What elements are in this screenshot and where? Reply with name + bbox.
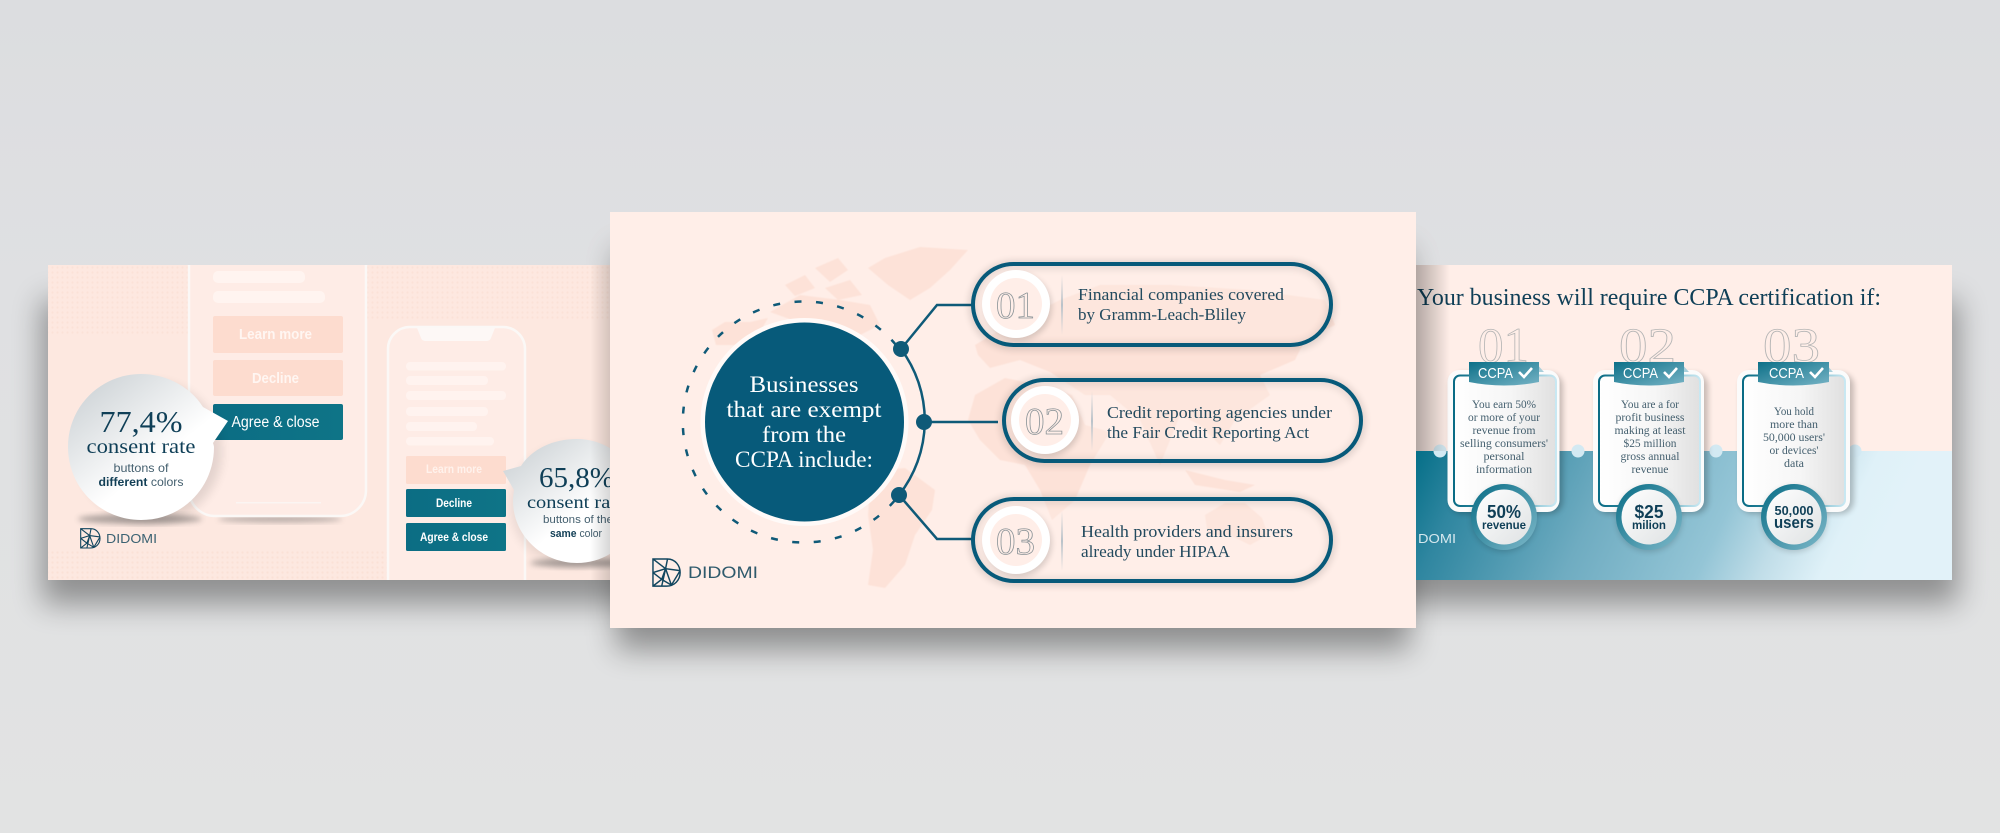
panel shadows	[42, 250, 1958, 650]
button: agree and close: Agree & close	[232, 414, 320, 431]
floor shadow: large phone	[218, 516, 342, 522]
item 3	[973, 499, 1331, 582]
large phone	[189, 240, 366, 516]
button: decline small: Decline	[436, 498, 472, 510]
card text: selling consumers'	[1460, 438, 1548, 450]
card 3	[1737, 317, 1854, 552]
card text: profit business	[1616, 412, 1685, 424]
ribbon: CCPA	[1769, 365, 1804, 382]
button: learn more	[213, 316, 343, 353]
title circle	[700, 318, 908, 526]
stat: $25 million	[1616, 484, 1682, 552]
card text: or more of your	[1468, 412, 1540, 424]
card text	[1763, 406, 1825, 470]
item 1	[973, 264, 1331, 346]
stat: 50% revenue: 50%	[1487, 502, 1521, 522]
callout: 65,8% consent rate	[503, 439, 610, 566]
panel: CCPA exemptions slide	[610, 212, 1416, 628]
card text: information	[1476, 464, 1532, 476]
card text: or devices'	[1770, 445, 1818, 457]
callout: 77,4% consent rate: different colors	[98, 475, 184, 489]
stat: $25 million: milion	[1632, 518, 1666, 532]
button: agree and close small: Agree & close	[420, 532, 488, 544]
button: decline	[213, 360, 343, 396]
callout: 77,4% consent rate	[68, 374, 228, 523]
floor shadow: bubble 77,4%	[78, 514, 202, 524]
callout: 77,4% consent rate: buttons of	[114, 461, 169, 475]
callout: 65,8% consent rate: same color	[550, 528, 602, 540]
title circle: CCPA include:	[735, 447, 873, 472]
item 1: by Gramm-Leach-Bliley	[1078, 305, 1247, 324]
card text: data	[1784, 458, 1804, 470]
floor shadow: bubble 65,8%	[530, 558, 630, 568]
stat: 50,000 users: users	[1774, 513, 1814, 532]
card text: You earn 50%	[1472, 399, 1536, 411]
card text: revenue	[1632, 464, 1668, 476]
ribbon: CCPA	[1478, 365, 1513, 382]
item 1: Financial companies covered	[1078, 285, 1285, 304]
panel: consent rate slide	[48, 265, 610, 580]
world map	[712, 247, 1335, 588]
item 1: 01	[996, 285, 1035, 327]
item 3: already under HIPAA	[1081, 542, 1230, 561]
card 2	[1593, 317, 1708, 552]
heading: Your business will require CCPA certification if:	[1417, 284, 1881, 311]
ribbon	[1469, 362, 1544, 386]
button: learn more: Learn more	[239, 326, 312, 343]
wave dots	[1434, 444, 1862, 458]
ribbon: CCPA	[1623, 365, 1658, 382]
callout: 65,8% consent rate: 65,8%	[539, 463, 614, 494]
card text: You hold	[1774, 406, 1814, 418]
small phone	[386, 326, 526, 580]
button: decline small	[406, 489, 506, 517]
card text: 50,000 users'	[1763, 432, 1825, 444]
logo text fragment: DOMI	[1418, 531, 1456, 546]
card 1	[1448, 317, 1563, 552]
panel: CCPA certification slide	[1416, 265, 1952, 580]
ribbon	[1614, 362, 1689, 386]
item 2: Credit reporting agencies under	[1107, 403, 1333, 422]
card text: You are a for	[1621, 399, 1679, 411]
button: learn more small: Learn more	[426, 464, 482, 476]
number 01: 01	[1478, 317, 1529, 373]
item 3: 03	[996, 521, 1035, 563]
card text: making at least	[1614, 425, 1686, 437]
card text: revenue from	[1472, 425, 1536, 437]
stat: 50,000 users: 50,000	[1774, 504, 1814, 518]
button: decline: Decline	[252, 370, 299, 387]
connectors	[899, 305, 998, 539]
dashed ring	[683, 302, 896, 542]
number 02: 02	[1619, 317, 1676, 373]
callout: 65,8% consent rate: consent rate	[527, 492, 625, 512]
logo: didomi: DIDOMI	[688, 563, 758, 582]
connector dots	[891, 341, 932, 503]
teal wave band	[1416, 451, 1952, 580]
number 03: 03	[1763, 317, 1820, 373]
item 2	[1004, 380, 1361, 462]
button: agree and close	[213, 404, 343, 440]
callout: 65,8% consent rate: buttons of the	[543, 514, 613, 526]
button: learn more small	[406, 456, 506, 484]
callout: 77,4% consent rate: consent rate	[86, 436, 196, 458]
item 2: 02	[1025, 401, 1064, 443]
callout: 77,4% consent rate: 77,4%	[100, 404, 182, 439]
logo: didomi small	[81, 529, 157, 548]
stat: 50,000 users	[1761, 484, 1827, 552]
stat: 50% revenue	[1471, 484, 1537, 552]
title circle: from the	[762, 422, 846, 447]
card text	[1460, 399, 1548, 476]
title circle: that are exempt	[726, 397, 882, 422]
card text: $25 million	[1624, 437, 1677, 450]
item 2: the Fair Credit Reporting Act	[1107, 423, 1309, 442]
logo: didomi	[653, 559, 758, 586]
button: agree and close small	[406, 523, 506, 551]
logo: didomi small: DIDOMI	[106, 531, 157, 546]
stat: $25 million: $25	[1634, 502, 1664, 522]
item 3: Health providers and insurers	[1081, 522, 1293, 541]
ribbon	[1758, 362, 1833, 386]
card text: personal	[1484, 451, 1524, 463]
card text	[1614, 399, 1686, 476]
card text: gross annual	[1620, 451, 1680, 463]
title circle: Businesses	[750, 372, 859, 397]
stat: 50% revenue: revenue	[1482, 518, 1526, 532]
card text: more than	[1770, 419, 1818, 431]
